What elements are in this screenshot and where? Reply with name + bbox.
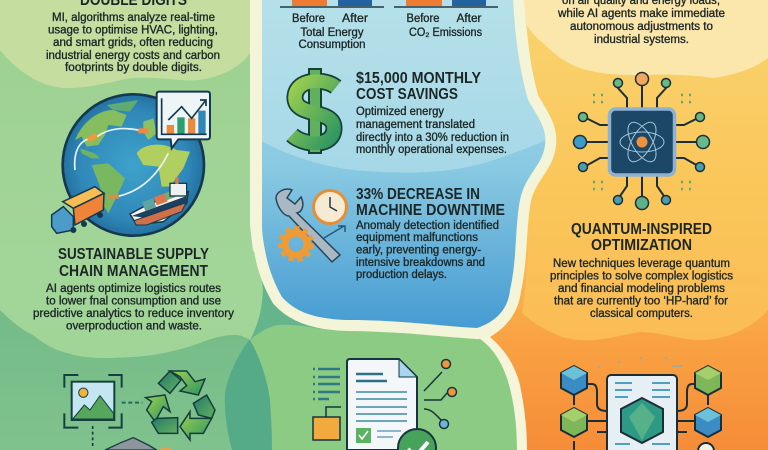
icon: quantum chip	[574, 72, 710, 210]
chart: before and after bars	[280, 0, 498, 51]
chart: before and after bars: Before	[406, 13, 440, 25]
chart: before and after bars: CO₂ Emissions	[409, 27, 482, 39]
text: air quality: while AI agents make immediate	[557, 8, 725, 20]
text: monthly cost savings	[356, 70, 509, 156]
text: air quality: autonomous adjustments to	[570, 21, 713, 33]
chart: before and after bars: Before	[292, 13, 325, 25]
heading: quantum-inspired optimization: OPTIMIZATION	[591, 237, 692, 254]
icon: document with cubes network	[561, 358, 721, 450]
text: machine downtime: intensive breakdowns and	[356, 257, 485, 269]
icon: wrench, clock and gear	[276, 189, 346, 262]
text: quantum body: principles to solve complex logistics	[550, 270, 733, 282]
text: air quality: industrial systems.	[594, 34, 689, 46]
icon: globe with truck, ship and chart	[52, 92, 210, 236]
icon: document with check	[313, 359, 456, 450]
text: quantum body: that are currently too ‘HP-hard’ for	[554, 296, 728, 308]
text: monthly cost savings: monthly operational expenses.	[356, 144, 507, 156]
text: supply chain body: to lower fnal consumption and use	[46, 296, 221, 308]
lower dark blob	[0, 310, 250, 450]
chart: before and after bars: After	[342, 13, 368, 25]
heading: sustainable supply chain management: SUSTAINABLE SUPPLY	[58, 246, 210, 263]
text: quantum body: New techniques leverage quantum	[553, 258, 730, 270]
text: monthly cost savings: COST SAVINGS	[356, 86, 458, 103]
text: machine downtime: early, preventing energy-	[356, 244, 481, 256]
panel: case-study results blue	[255, 0, 560, 328]
text: supply chain body	[33, 283, 234, 332]
ship	[130, 192, 188, 225]
text: quantum body	[550, 258, 733, 320]
text: machine downtime	[356, 186, 505, 281]
chart: before and after bars: Consumption	[298, 39, 366, 51]
text: supply chain body: predictive analytics to reduce inventory	[33, 308, 234, 320]
cream blob	[523, 0, 768, 78]
heading: sustainable supply chain management	[58, 246, 210, 280]
lighter band	[255, 0, 560, 173]
text: machine downtime: equipment malfunctions	[356, 232, 478, 244]
text: monthly cost savings: Optimized energy	[356, 106, 444, 118]
text: quantum body: classical computers.	[590, 308, 693, 320]
chart callout	[157, 92, 210, 148]
text: supply chain body: overproduction and waste.	[66, 320, 202, 332]
icon: image scan and recycle	[64, 371, 215, 450]
top light blob	[0, 0, 250, 88]
text: double digits: footprints by double digits.	[65, 62, 202, 74]
panel: right column orange	[490, 0, 768, 450]
icon: dollar sign	[292, 69, 336, 153]
heading: quantum-inspired optimization	[571, 221, 712, 254]
text: machine downtime: 33% DECREASE IN	[356, 186, 480, 203]
panel: sustainable operations left column	[0, 0, 263, 450]
panel: teal backdrop between columns	[215, 250, 340, 450]
light yellow blob	[522, 200, 768, 340]
recycle arrows	[158, 371, 181, 393]
chart: before and after bars: Total Energy	[300, 27, 364, 39]
text: double digits	[46, 0, 220, 74]
heading: quantum-inspired optimization: QUANTUM-INSPIRED	[571, 221, 712, 238]
text: quantum body: and financial modeling problems	[558, 283, 725, 295]
text: supply chain body: AI agents optimize logistics routes	[46, 283, 221, 295]
panel: lower centre green	[250, 325, 517, 450]
text: machine downtime: Anomaly detection identified	[356, 220, 499, 232]
text: monthly cost savings: management translated	[356, 119, 475, 131]
heading: sustainable supply chain management: CHAIN MANAGEMENT	[59, 263, 208, 280]
truck	[63, 187, 104, 208]
panel: dark teal blob	[225, 340, 280, 450]
chart: before and after bars: After	[456, 13, 482, 25]
text: machine downtime: MACHINE DOWNTIME	[356, 202, 505, 219]
text: monthly cost savings: $15,000 MONTHLY	[356, 70, 482, 87]
text: air quality	[557, 0, 725, 46]
text: double digits: industrial energy costs and carbon	[46, 50, 220, 62]
text: double digits: and smart grids, often reducing	[53, 37, 213, 49]
text: double digits: MI, algorithms analyze real-time	[52, 12, 215, 24]
text: monthly cost savings: directly into a 30% reduction in	[356, 132, 509, 144]
text: double digits: usage to optimise HVAC, lighting,	[48, 24, 218, 36]
rock pile	[105, 438, 157, 450]
text: machine downtime: production delays.	[356, 269, 447, 281]
